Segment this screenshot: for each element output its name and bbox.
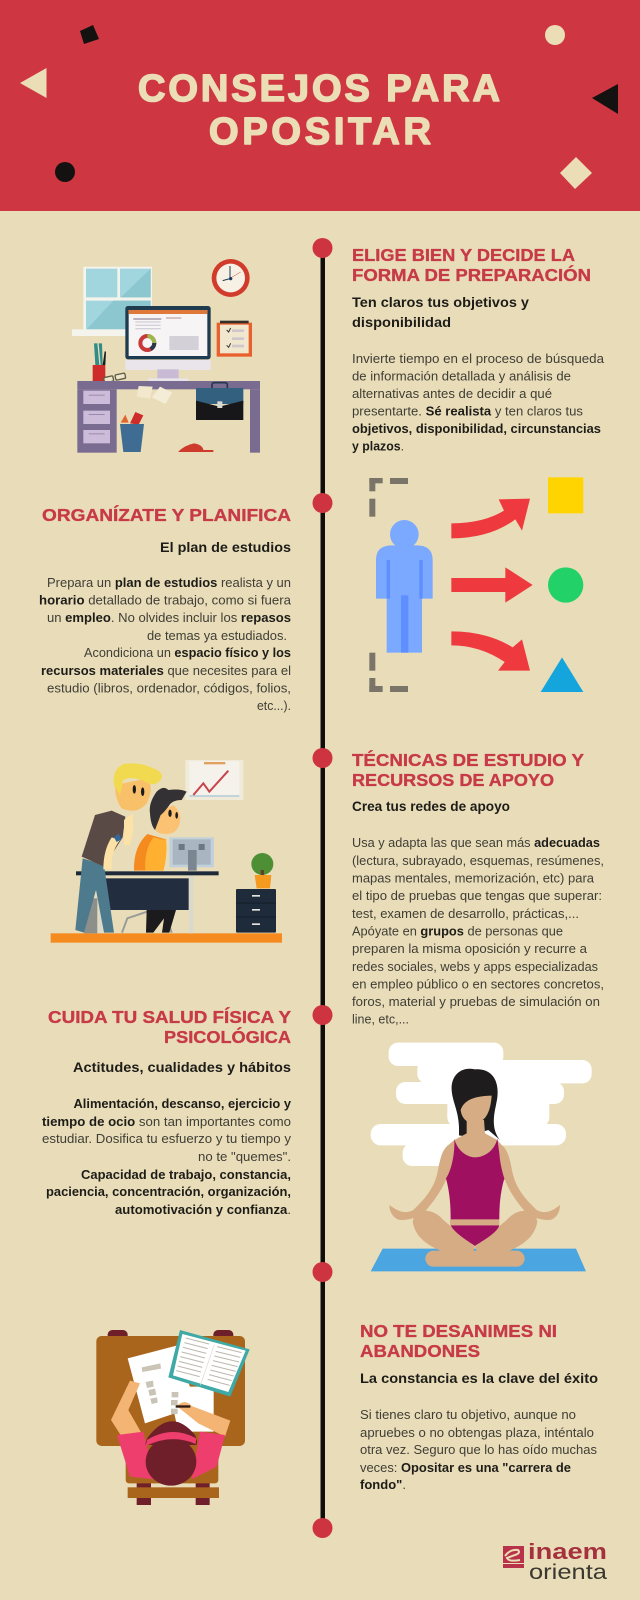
body text: estudio (libros, ordenador, códigos, folios,	[47, 682, 291, 696]
body text: presentarte. Sé realista y ten claros tus	[352, 404, 583, 418]
logo wordmark: inaem	[528, 1539, 607, 1564]
swimsuit	[446, 1138, 504, 1246]
subheading: La constancia es la clave del éxito	[360, 1370, 598, 1386]
body text: no te "quemes".	[198, 1150, 291, 1164]
body text	[39, 576, 291, 713]
heading: ELIGE BIEN Y DECIDE LA	[352, 245, 575, 265]
cabinet	[236, 889, 276, 933]
body text: Invierte tiempo en el proceso de búsqueda	[352, 352, 604, 366]
heading	[360, 1321, 557, 1361]
body text: etc...).	[257, 699, 291, 713]
body text: recursos materiales que necesites para el	[41, 664, 291, 678]
illustration: yoga woman	[371, 1043, 592, 1271]
heading: NO TE DESANIMES NI	[360, 1321, 557, 1341]
icon: yellow square	[548, 477, 583, 513]
heading: CUIDA TU SALUD FÍSICA Y	[48, 1006, 291, 1027]
body text	[352, 836, 604, 1026]
heading: FORMA DE PREPARACIÓN	[352, 264, 591, 285]
logo wordmark	[528, 1539, 607, 1584]
heading: TÉCNICAS DE ESTUDIO Y	[352, 749, 584, 770]
body text: y plazos.	[352, 440, 404, 454]
body text: Apóyate en grupos de personas que	[352, 924, 563, 938]
body text: Prepara un plan de estudios realista y un	[47, 576, 291, 590]
body text: line, etc,...	[352, 1012, 409, 1026]
desk	[76, 871, 219, 933]
body text: horario detallado de trabajo, como si fuera	[39, 594, 291, 608]
icon: cream triangle	[20, 68, 46, 98]
heading	[352, 245, 591, 285]
body text: Alimentación, descanso, ejercicio y	[74, 1097, 291, 1111]
icon: black diamond	[80, 25, 99, 44]
panel: no te desanimes	[360, 1321, 598, 1492]
heading: ABANDONES	[360, 1341, 480, 1361]
body text: automotivación y confianza .	[115, 1203, 291, 1217]
open book	[168, 1330, 250, 1397]
body text: objetivos, disponibilidad, circunstancias	[352, 422, 601, 436]
timeline	[312, 238, 332, 1538]
heading: RECURSOS DE APOYO	[352, 770, 554, 790]
desk	[96, 1330, 245, 1446]
icon: black circle	[55, 162, 75, 182]
body text: Acondiciona un espacio físico y los	[84, 646, 291, 660]
icon: cream circle	[545, 25, 565, 45]
icon: cream diamond	[560, 157, 592, 189]
student	[111, 1381, 230, 1486]
title: OPOSITAR	[209, 111, 431, 153]
arrow: down right	[451, 631, 530, 671]
logo mark	[503, 1546, 524, 1568]
seated man	[134, 788, 187, 933]
subheading: Actitudes, cualidades y hábitos	[73, 1059, 291, 1075]
computer monitor	[169, 837, 214, 871]
standing man	[75, 763, 162, 933]
frame corners	[369, 478, 408, 692]
body text: de temas ya estudiados.	[147, 629, 287, 643]
body text: test, examen de desarrollo, prácticas,...	[352, 907, 579, 921]
cloud	[371, 1043, 592, 1166]
icon: black triangle	[592, 84, 618, 114]
illustration: office desk	[72, 259, 260, 453]
body text: veces: Opositar es una "carrera de	[360, 1461, 571, 1475]
chart poster	[185, 760, 243, 800]
body	[389, 1096, 560, 1267]
logo wordmark: orienta	[529, 1561, 607, 1584]
body text: Usa y adapta las que sean más adecuadas	[352, 836, 600, 850]
body text: de información detallada y análisis de	[352, 370, 571, 384]
body text: mapas mentales, memorización, etc) para	[352, 872, 594, 886]
body text: en empleo público o en sectores concretos,	[352, 978, 604, 992]
papers	[128, 1345, 214, 1432]
body text: foros, material y pruebas de simulación on	[352, 995, 600, 1009]
floor	[51, 933, 282, 943]
body text: fondo".	[360, 1478, 406, 1492]
heading	[48, 1006, 291, 1047]
subheading	[352, 294, 529, 330]
body text: Capacidad de trabajo, constancia,	[81, 1168, 291, 1182]
body text: el tipo de pruebas que tengas que superar:	[352, 889, 602, 903]
panel: cuida tu salud	[42, 1006, 292, 1217]
body text	[352, 352, 604, 454]
illustration: two men at computer	[51, 760, 282, 943]
arrow: right	[451, 567, 533, 603]
icon: person	[376, 520, 433, 653]
body text: (lectura, subrayado, esquemas, resúmenes,	[352, 854, 604, 868]
yoga mat	[371, 1249, 586, 1271]
arrow: up right	[451, 499, 530, 538]
illustration: person and options	[369, 477, 583, 692]
illustration: student from above	[96, 1330, 250, 1505]
heading: PSICOLÓGICA	[164, 1026, 291, 1047]
panel: elige bien	[352, 245, 604, 454]
panel: tecnicas	[352, 749, 604, 1026]
header banner	[0, 0, 640, 211]
body text: redes sociales, webs y apps especializadas	[352, 960, 598, 974]
hair	[452, 1069, 500, 1140]
body text: un empleo. No olvides incluir los repasos	[47, 611, 291, 625]
potted plant	[251, 853, 273, 888]
body text	[360, 1408, 597, 1492]
icon: green circle	[548, 567, 583, 603]
body text: Si tienes claro tu objetivo, aunque no	[360, 1408, 576, 1422]
title	[138, 68, 500, 153]
logo: inaem orienta	[503, 1539, 607, 1584]
title: CONSEJOS PARA	[138, 68, 500, 110]
heading	[352, 749, 584, 790]
body text: alternativas antes de decidir a qué	[352, 387, 552, 401]
body text: estudiar. Dosifica tu esfuerzo y tu tiempo y	[42, 1132, 292, 1146]
body text: preparen la misma oposición y recurre a	[352, 942, 587, 956]
body text	[42, 1097, 292, 1217]
icon: blue triangle	[541, 657, 583, 692]
subheading: El plan de estudios	[160, 539, 291, 555]
body text: tiempo de ocio son tan importantes como	[42, 1115, 291, 1129]
heading: ORGANÍZATE Y PLANIFICA	[42, 504, 291, 525]
subheading: Crea tus redes de apoyo	[352, 798, 510, 814]
body text: paciencia, concentración, organización,	[46, 1185, 291, 1199]
body text: otra vez. Seguro que lo has oído muchas	[360, 1443, 597, 1457]
subheading: disponibilidad	[352, 314, 451, 330]
panel: organizate	[39, 504, 291, 713]
subheading: Ten claros tus objetivos y	[352, 294, 529, 310]
body text: apruebes o no obtengas plaza, inténtalo	[360, 1426, 594, 1440]
chair	[126, 1446, 219, 1505]
